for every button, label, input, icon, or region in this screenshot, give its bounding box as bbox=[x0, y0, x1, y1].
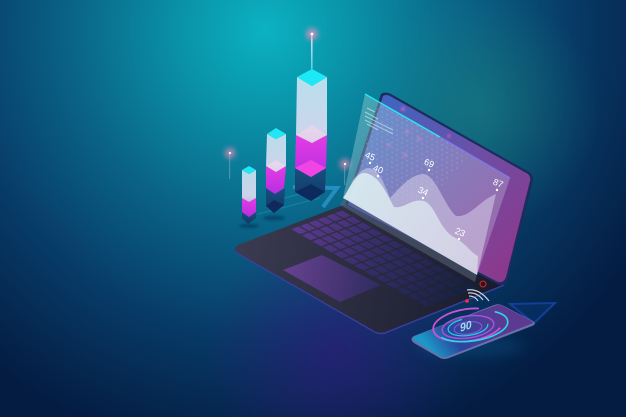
laptop screen bbox=[345, 92, 533, 285]
light beams above bars bbox=[225, 28, 350, 185]
keyboard bbox=[290, 210, 479, 308]
bar: medium column bbox=[263, 128, 286, 220]
blue triangle behind phone bbox=[510, 303, 555, 323]
data labels: 34 bbox=[417, 185, 430, 198]
bar: large column bbox=[295, 69, 327, 201]
power button bbox=[480, 281, 486, 287]
phone value: 90 bbox=[460, 319, 472, 335]
connector lines from bars to laptop bbox=[258, 187, 337, 214]
phone rings bbox=[431, 304, 510, 346]
bar: small column bbox=[239, 166, 259, 228]
text lines bbox=[365, 108, 393, 134]
laptop base bbox=[235, 205, 505, 334]
screen glows bbox=[387, 107, 451, 157]
holographic glass chart panel bbox=[340, 94, 510, 282]
smartphone bbox=[412, 304, 535, 359]
trackpad bbox=[283, 255, 381, 302]
data labels: 45 bbox=[364, 150, 377, 163]
area chart bbox=[343, 168, 496, 275]
data labels: 40 bbox=[372, 163, 385, 176]
data labels bbox=[364, 150, 505, 240]
wifi signal bbox=[465, 290, 489, 303]
data labels: 23 bbox=[454, 226, 467, 239]
data labels: 87 bbox=[492, 177, 505, 190]
data labels: 69 bbox=[423, 157, 436, 170]
